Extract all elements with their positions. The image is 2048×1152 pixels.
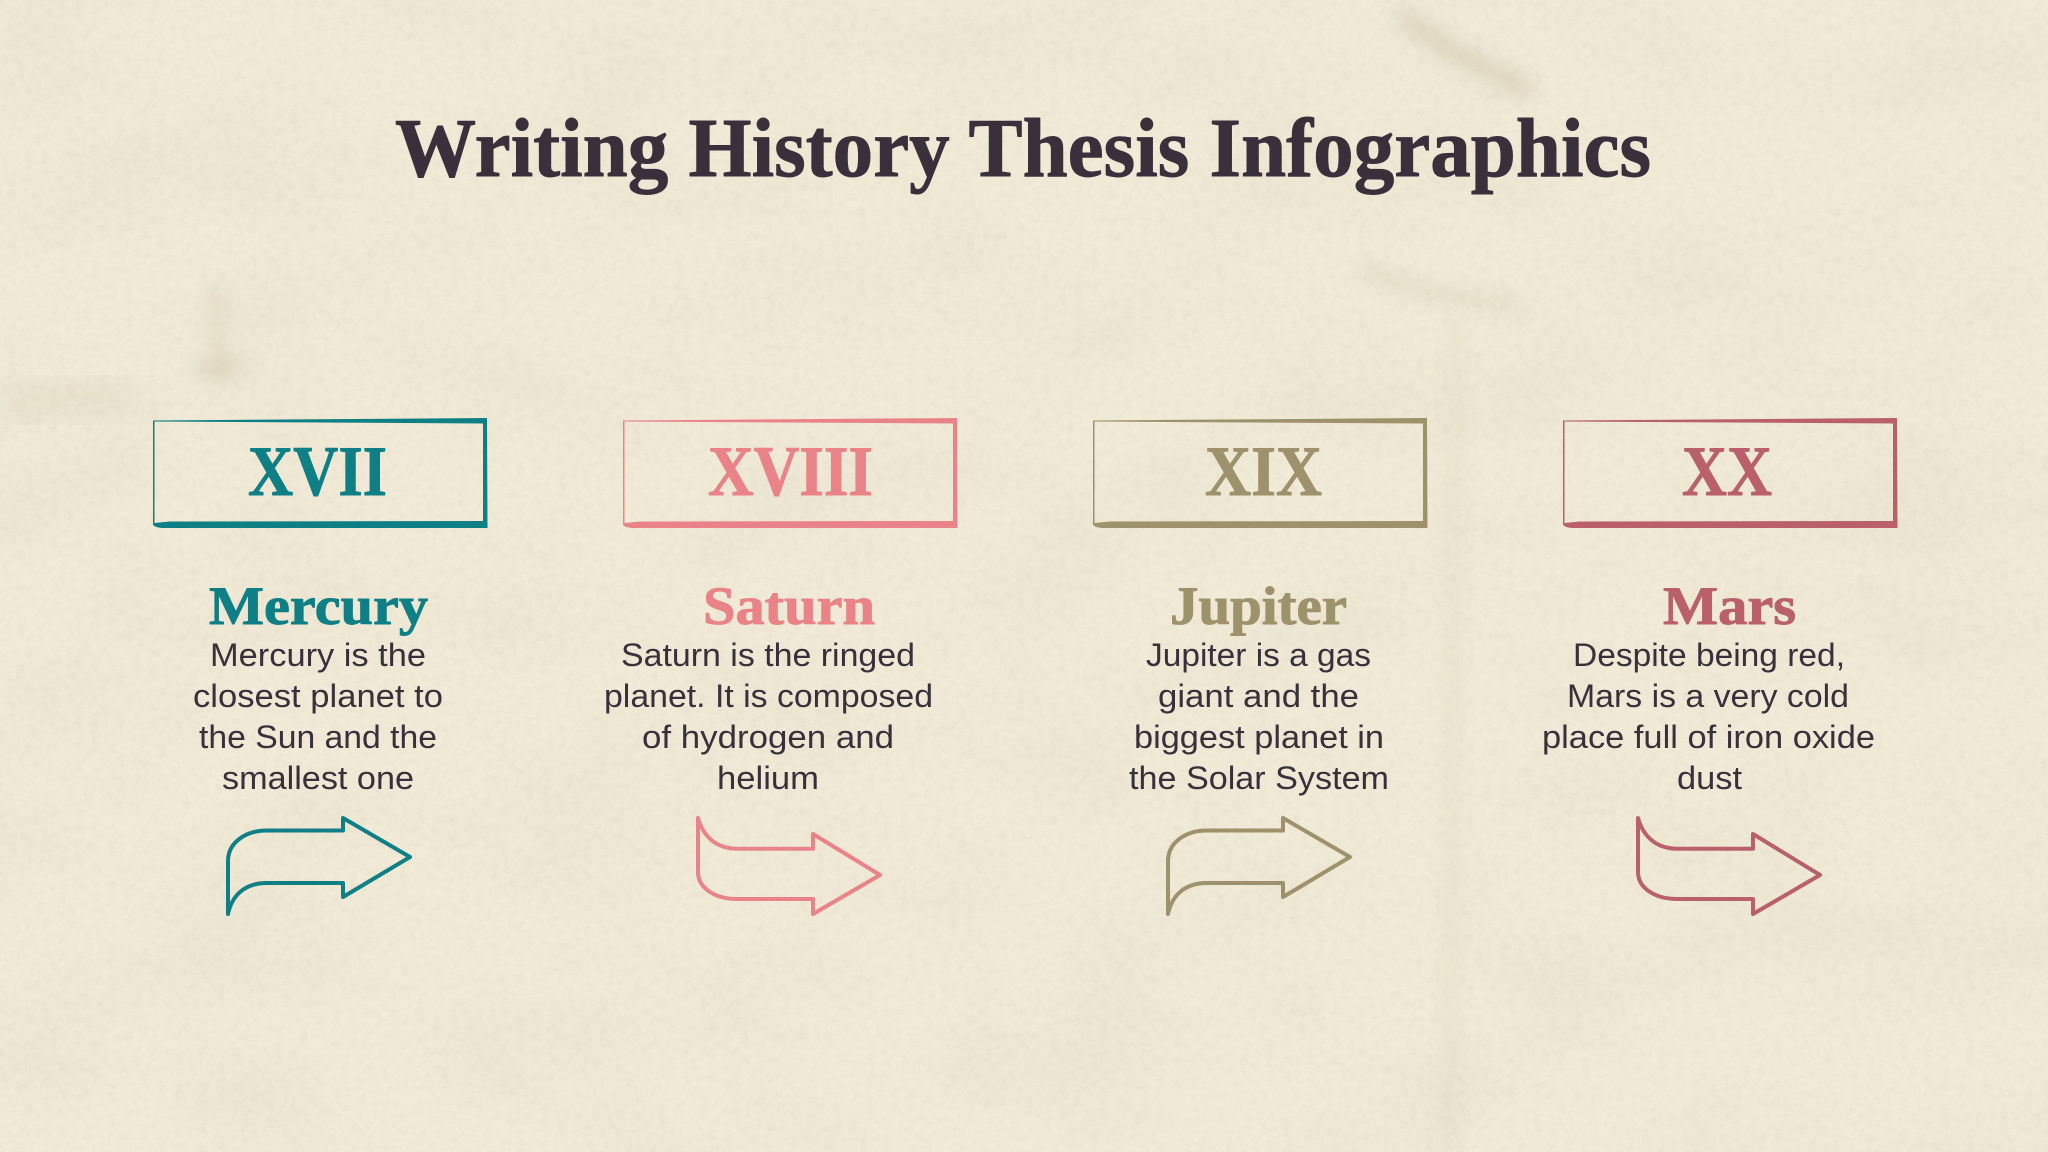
panel: Mars XX (1542, 418, 1898, 914)
text: Mercury description (193, 637, 443, 796)
text: Jupiter description (1129, 637, 1389, 796)
text: Jupiter description: giant and the (1158, 678, 1359, 714)
year box XIX (1093, 418, 1428, 528)
arrow: curved right, teal (228, 818, 410, 914)
arrow: curved right, rose (1638, 818, 1820, 914)
text: Jupiter description: the Solar System (1129, 760, 1389, 796)
arrow: curved right, pink (698, 818, 880, 914)
text: Mercury description: Mercury is the (210, 637, 426, 673)
title: Writing History Thesis Infographics (395, 102, 1651, 195)
text: Mercury description: closest planet to (193, 678, 443, 714)
year box XVIII: XVIII (708, 433, 873, 511)
panel: Saturn XVIII (604, 418, 958, 914)
text: Mars description (1542, 637, 1875, 796)
panel: Jupiter XIX (1093, 418, 1428, 914)
text: Saturn description (604, 637, 933, 796)
text: Mercury description: the Sun and the (199, 719, 437, 755)
arrow: curved right, olive (1168, 818, 1350, 914)
heading: Mercury: Mercury (209, 576, 428, 636)
panel: Mercury XVII (153, 418, 488, 914)
text: Saturn description: Saturn is the ringed (621, 637, 915, 673)
year box XVII: XVII (248, 433, 387, 511)
text: Mars description: Despite being red, (1573, 637, 1845, 673)
year box XX: XX (1682, 433, 1772, 511)
text: Saturn description: of hydrogen and (642, 719, 894, 755)
text: Jupiter description: biggest planet in (1134, 719, 1384, 755)
text: Jupiter description: Jupiter is a gas (1146, 637, 1371, 673)
year box XVIII (623, 418, 958, 528)
text: Mars description: place full of iron oxide (1542, 719, 1875, 755)
year box XX (1563, 418, 1898, 528)
heading: Jupiter: Jupiter (1170, 576, 1347, 636)
text: Mercury description: smallest one (222, 760, 414, 796)
text: Mars description: dust (1677, 760, 1742, 796)
heading: Saturn: Saturn (703, 576, 875, 636)
text: Mars description: Mars is a very cold (1567, 678, 1849, 714)
text: Saturn description: planet. It is composed (604, 678, 933, 714)
text: Saturn description: helium (717, 760, 819, 796)
heading: Mars: Mars (1663, 576, 1796, 636)
year box XVII (153, 418, 488, 528)
year box XIX: XIX (1205, 433, 1322, 511)
